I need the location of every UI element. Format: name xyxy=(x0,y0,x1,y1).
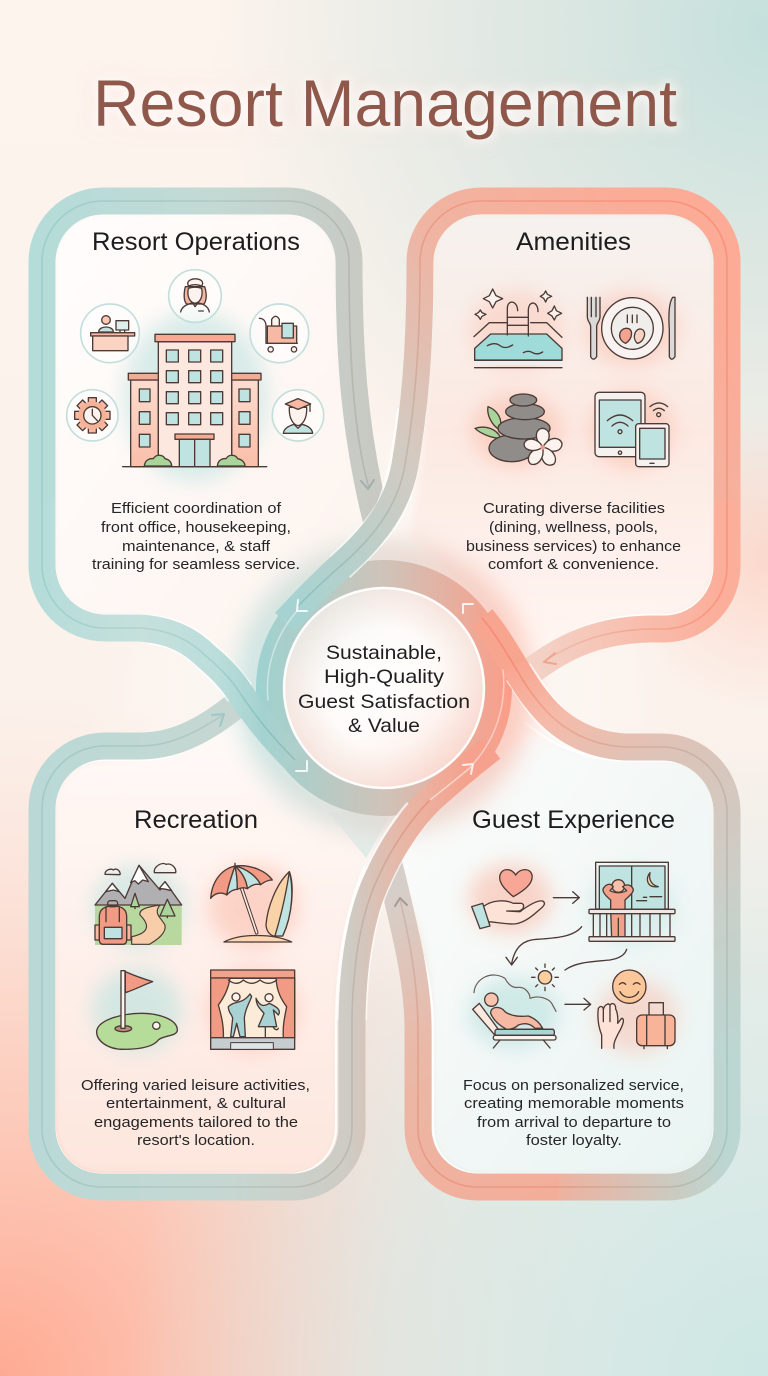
golf xyxy=(97,1013,177,1049)
gear xyxy=(75,398,110,433)
icon: hotel and staff xyxy=(67,270,324,482)
text: guest experience: creating memorable moments xyxy=(464,1095,684,1112)
building xyxy=(131,380,158,467)
text: resort operations: front office, housekeeping, xyxy=(101,519,291,536)
hand waving xyxy=(598,1004,623,1048)
lounger xyxy=(485,993,498,1006)
text: amenities: Curating diverse facilities xyxy=(483,500,665,517)
text: recreation: Offering varied leisure activities, xyxy=(81,1077,310,1094)
panel fills xyxy=(55,214,714,1174)
heading: resort operations: Resort Operations xyxy=(92,228,300,256)
dining xyxy=(587,297,600,359)
text: amenities xyxy=(466,500,681,573)
text: recreation: resort's location. xyxy=(137,1132,255,1149)
ribbon: recreation xyxy=(42,702,492,1187)
icon: amenities xyxy=(470,289,678,468)
center text: Sustainable, xyxy=(326,642,442,664)
pool xyxy=(475,334,562,360)
suitcase xyxy=(649,1003,663,1015)
text: recreation: engagements tailored to the xyxy=(94,1114,298,1131)
heading: recreation: Recreation xyxy=(134,806,258,834)
nurse xyxy=(184,287,206,304)
center text: High-Quality xyxy=(324,666,444,688)
hand and heart xyxy=(500,870,532,897)
icon: guest journey xyxy=(468,862,677,1053)
panel: guest experience xyxy=(463,806,684,1149)
text: guest experience: Focus on personalized service, xyxy=(463,1077,684,1094)
theatre xyxy=(211,978,295,1038)
central ring xyxy=(270,574,498,802)
graduate xyxy=(289,407,307,426)
text: guest experience: from arrival to departure to xyxy=(477,1114,671,1131)
ribbon: amenities upper xyxy=(285,201,727,622)
stones xyxy=(488,407,501,430)
cloud line xyxy=(474,975,556,1011)
heading: guest experience: Guest Experience xyxy=(472,806,675,834)
text: resort operations: maintenance, & staff xyxy=(122,538,271,555)
sun xyxy=(538,971,552,984)
tablets xyxy=(595,392,645,457)
mountains xyxy=(95,905,182,945)
panel: recreation xyxy=(81,806,310,1149)
panel: amenities xyxy=(466,228,681,573)
balcony xyxy=(596,862,668,909)
text: recreation xyxy=(81,1077,310,1149)
text: amenities: business services) to enhance xyxy=(466,538,681,555)
ribbon: guest experience xyxy=(388,618,727,1187)
ribbon: resort operations xyxy=(42,201,380,760)
desk xyxy=(102,316,110,324)
heading: amenities: Amenities xyxy=(516,228,631,256)
lower diamond xyxy=(328,812,392,858)
cart xyxy=(259,318,297,343)
arrow: balcony to lounger xyxy=(506,927,582,965)
text: resort operations: training for seamless service. xyxy=(92,556,300,573)
smile xyxy=(613,970,646,1003)
ring corner arrows xyxy=(267,604,504,771)
ribbon: amenities lower tail xyxy=(530,500,727,672)
text: guest experience xyxy=(463,1077,684,1149)
center circle xyxy=(284,588,484,788)
arrow: hand to balcony xyxy=(553,892,579,903)
center text xyxy=(298,642,470,737)
panel: resort operations xyxy=(67,228,324,573)
text: amenities: comfort & convenience. xyxy=(488,556,659,573)
text: resort operations xyxy=(92,500,300,573)
sun path xyxy=(565,949,627,970)
icon: recreation xyxy=(92,863,298,1052)
center text: & Value xyxy=(348,715,420,737)
panel inner edges xyxy=(55,214,714,1174)
center text: Guest Satisfaction xyxy=(298,691,470,713)
text: resort operations: Efficient coordination of xyxy=(111,500,282,517)
text: amenities: (dining, wellness, pools, xyxy=(489,519,658,536)
arrow: lounger to departure xyxy=(565,998,591,1010)
ring glow xyxy=(254,558,514,818)
umbrella xyxy=(242,888,257,933)
text: recreation: entertainment, & cultural xyxy=(106,1095,286,1112)
text: guest experience: foster loyalty. xyxy=(526,1132,622,1149)
title: Resort Management xyxy=(93,66,677,140)
